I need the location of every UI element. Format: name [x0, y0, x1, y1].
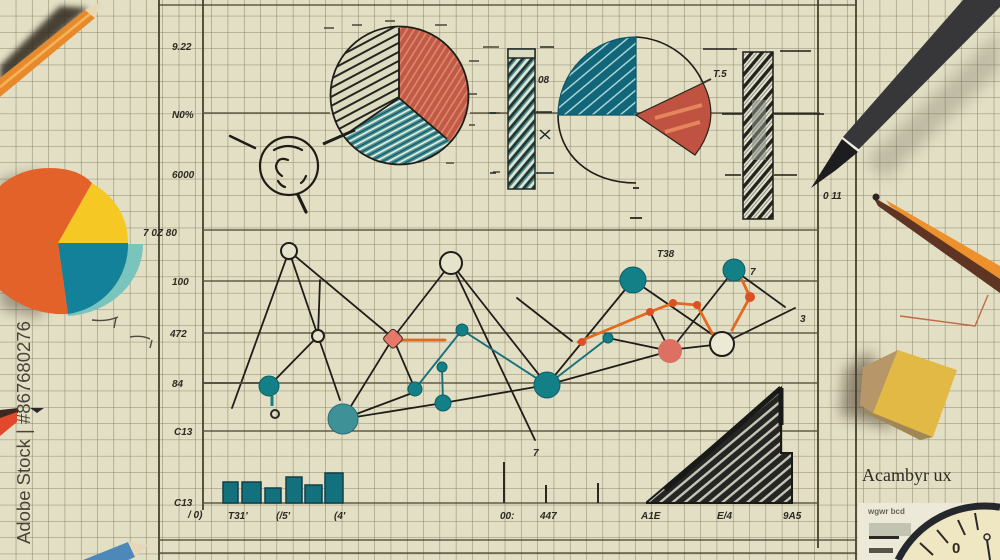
small teal bar chart	[223, 473, 343, 503]
axis labels: 9.22	[172, 42, 192, 53]
axis labels: 100	[172, 277, 189, 288]
yellow wooden cube	[840, 350, 957, 440]
hatched bar left: 08	[538, 75, 550, 86]
axis labels: C13	[174, 498, 193, 509]
axis labels: T38	[657, 249, 675, 260]
line network: black lines	[203, 251, 795, 440]
axis labels: 0 11	[823, 191, 842, 202]
dark hatched triangle chart	[647, 388, 792, 503]
axis labels: N0%	[172, 110, 194, 121]
pencil top left	[0, 1, 103, 97]
line network: nodes	[259, 243, 806, 459]
hatched bar right	[703, 49, 824, 219]
blue pencil stub bottom	[83, 542, 148, 560]
stock watermark id: Adobe Stock | #867680276	[13, 321, 34, 544]
axis labels: 6000	[172, 170, 195, 181]
axis labels: E/4	[717, 511, 732, 522]
axis labels: C13	[174, 427, 193, 438]
small tick marks on axis	[504, 462, 598, 503]
pen top right	[811, 0, 1000, 188]
line network: nodes: 3	[800, 314, 806, 325]
gauge dial: 0	[952, 540, 960, 557]
magnifying glass icon	[230, 136, 318, 212]
axis labels: 472	[169, 329, 187, 340]
axis labels: 447	[539, 511, 557, 522]
large solid pie chart	[0, 168, 143, 318]
pie chart top right: teal and red wedges	[558, 37, 711, 218]
axis labels: (/5'	[276, 511, 291, 522]
bottom right caption	[858, 465, 1000, 560]
axis labels: 9A5	[783, 511, 802, 522]
line network: nodes: 7	[533, 448, 539, 459]
line network: nodes: 7	[750, 267, 756, 278]
axis labels: 7 0Z 80	[143, 228, 177, 239]
axis labels: T.5	[713, 69, 727, 80]
axis labels: T31'	[228, 511, 248, 522]
axis labels: A1E	[640, 511, 661, 522]
red pencil stub left	[0, 408, 44, 436]
pie chart top: hatched sketch	[320, 20, 500, 180]
bottom right caption: wgwr bcd	[867, 507, 905, 516]
frame and axis lines	[158, 0, 856, 560]
hatched bar left	[490, 47, 554, 189]
axis labels: / 0)	[187, 510, 203, 521]
pencil right	[872, 194, 1000, 293]
gauge dial	[898, 506, 1000, 560]
axis labels: 84	[172, 379, 184, 390]
bottom right caption: Acambyr ux	[862, 465, 951, 485]
axis labels	[143, 42, 842, 522]
scribble notes left and right	[92, 295, 988, 348]
axis labels: 00:	[500, 511, 514, 522]
axis labels: (4'	[334, 511, 346, 522]
line network: teal and orange traces	[393, 280, 750, 403]
